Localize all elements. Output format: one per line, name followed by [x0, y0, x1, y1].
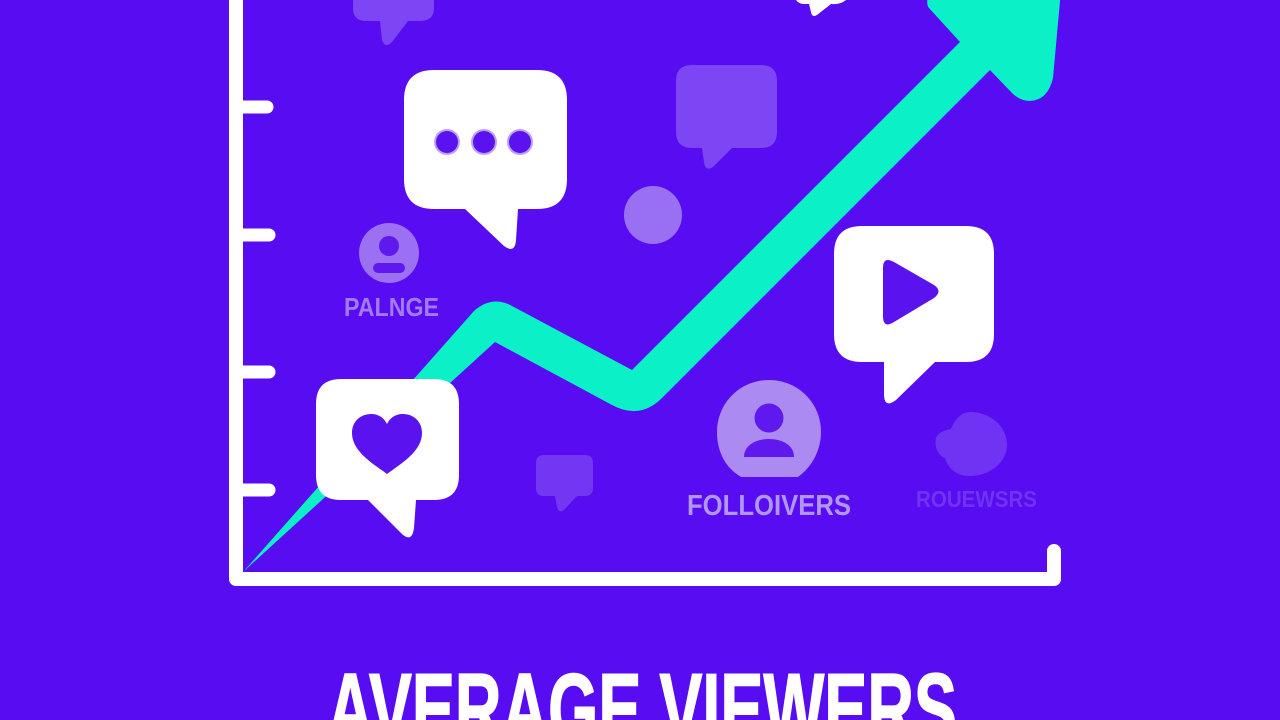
faint chat bubble centre — [676, 65, 777, 169]
decorative circle — [624, 186, 682, 244]
followers icon with label — [687, 380, 851, 522]
faint followers icon with label — [916, 412, 1037, 512]
faint chat bubble top left — [353, 0, 434, 45]
video bubble with play icon — [834, 226, 994, 403]
followers icon with label: FOLLOIVERS — [687, 490, 851, 522]
chat bubble with three dots — [404, 70, 567, 249]
faint followers icon with label: ROUEWSRS — [916, 486, 1037, 512]
faint chat bubble lower — [536, 455, 593, 511]
chart axes — [236, 0, 1054, 579]
growth arrow — [243, 0, 1061, 572]
small white bubble top — [795, 0, 846, 16]
profile icon with label — [344, 223, 439, 322]
profile icon with label: PALNGE — [344, 292, 439, 322]
heart chat bubble — [316, 379, 459, 537]
